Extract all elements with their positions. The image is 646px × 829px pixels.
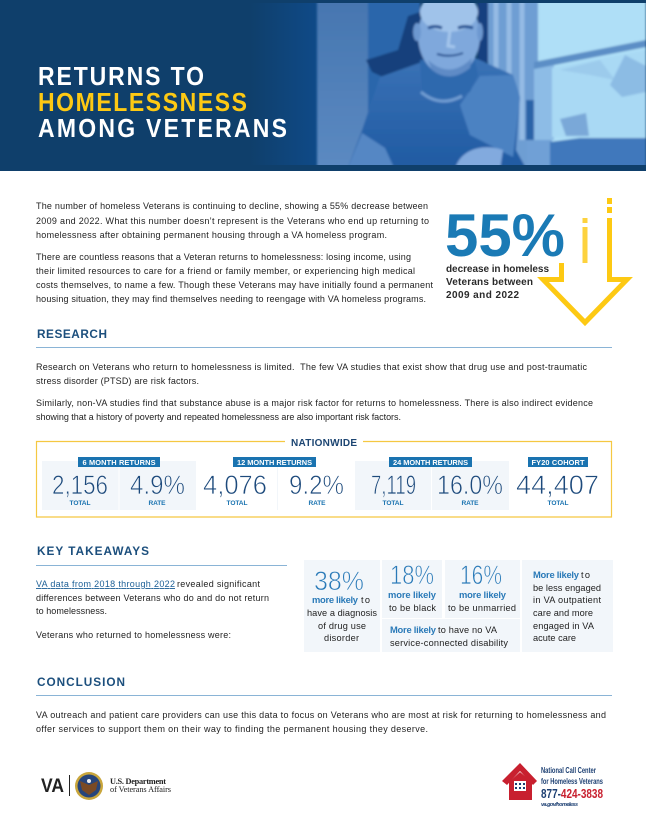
stat group: FY20 cohort: FY20 COHORT (532, 458, 585, 467)
icon: VA seal (75, 772, 103, 800)
title: RETURNS TO (38, 63, 204, 91)
callout: 55% decrease: 55% (445, 202, 565, 269)
panel: engagement in care: acute care (533, 633, 576, 643)
intro text: 2009 and 2022. What this number doesn’t represent is the Veterans who end up returning to (36, 216, 429, 226)
heading: nationwide: NATIONWIDE (291, 438, 357, 449)
conclusion text: VA outreach and patient care providers can use this data to focus on Veterans who are most at risk for returning to homelessness and (36, 710, 606, 720)
callout: 55% decrease: decrease in homeless (446, 264, 549, 275)
stat group: 24 month returns: TOTAL (382, 500, 404, 507)
icon: red house (502, 763, 537, 800)
panel: 16% unmarried: to be unmarried (448, 603, 516, 613)
intro text: housing situation, they may find themselves needing to reengage with VA homeless programs. (36, 294, 426, 304)
intro text (36, 201, 433, 304)
intro text: homelessness after obtaining permanent housing through a VA homeless program. (36, 230, 387, 240)
research text: Similarly, non-VA studies find that substance abuse is a major risk factor for returns to homelessness. There is also indirect evidence (36, 398, 593, 408)
stat group: 12 month returns: TOTAL (226, 500, 248, 507)
panel: 16% unmarried: 16% (460, 560, 502, 590)
panel: engagement in care: care and more (533, 608, 593, 618)
panel: 38% drug use disorder: more likely (312, 594, 359, 605)
key takeaways text: to homelessness. (36, 606, 107, 616)
header banner (0, 0, 646, 171)
intro text: costs themselves, to name a few. Though these Veterans may have initially found a permanent (36, 280, 433, 290)
research text: Research on Veterans who return to homelessness is limited. The few VA studies that exist show that drug use and post-traumatic (36, 362, 588, 372)
panel: nationwide statistics (36, 438, 612, 517)
stat group: 24 month returns: 7,119 (371, 470, 416, 500)
callout: 55% decrease: Veterans between (446, 277, 533, 288)
stat group: 6 month returns: RATE (148, 500, 166, 507)
stat group: 12 month returns: RATE (308, 500, 326, 507)
callout: 55% decrease: 2009 and 2022 (446, 290, 519, 301)
heading: key takeaways: KEY TAKEAWAYS (37, 544, 149, 558)
panel: 38% drug use disorder: 38% (314, 566, 364, 596)
heading: research: RESEARCH (37, 327, 107, 341)
logo: national call center: for Homeless Veterans (541, 776, 603, 786)
panel: 16% unmarried (445, 560, 520, 618)
title: HOMELESSNESS (38, 89, 247, 117)
callout: 55% decrease (445, 198, 627, 322)
panel: engagement in care: be less engaged (533, 583, 601, 593)
key takeaways text: revealed significant (177, 579, 260, 589)
header photo: man in a room (317, 0, 646, 170)
panel: 16% unmarried: more likely (459, 589, 507, 600)
stat group: FY20 cohort: TOTAL (548, 500, 568, 507)
stat group: 6 month returns: 2,156 (52, 470, 108, 500)
stat group: 12 month returns: 4,076 (203, 470, 267, 500)
key takeaways text: differences between Veterans who do and do not return (36, 593, 269, 603)
logo: VA department: of Veterans Affairs (110, 785, 171, 794)
panel: engagement in care (522, 560, 613, 652)
panel: engagement in care: to (581, 570, 590, 580)
panel: 38% drug use disorder (304, 560, 380, 652)
panel: 38% drug use disorder: have a diagnosis (307, 608, 377, 618)
conclusion text (36, 710, 606, 734)
stat group: 6 month returns: TOTAL (70, 500, 90, 507)
stat group: 24 month returns: 24 MONTH RETURNS (393, 458, 468, 467)
stat group: 12 month returns (203, 457, 344, 507)
panel: 18% black: to be black (389, 603, 436, 613)
panel: 38% drug use disorder: to (361, 595, 370, 605)
stat group: 6 month returns (52, 457, 185, 507)
panel: 38% drug use disorder: of drug use (318, 621, 366, 631)
logo: VA department: U.S. Department (110, 777, 166, 786)
panel: no service-connected disability: service-connected disability (390, 638, 508, 648)
research text (36, 362, 593, 422)
panel: engagement in care: engaged in VA (533, 621, 595, 631)
stat group: 12 month returns: 9.2% (289, 470, 344, 500)
panel: 18% black: more likely (388, 589, 437, 600)
panel: engagement in care: in VA outpatient (533, 595, 601, 605)
intro text: their limited resources to care for a friend or family member, or experiencing high medical (36, 266, 415, 276)
stat group: 6 month returns: 6 MONTH RETURNS (82, 458, 156, 467)
title (38, 63, 287, 143)
panel: no service-connected disability (382, 619, 520, 652)
key takeaways text: VA data from 2018 through 2022 (36, 579, 175, 589)
panel: 38% drug use disorder: disorder (324, 633, 359, 643)
title: AMONG VETERANS (38, 115, 287, 143)
stat group: 24 month returns: 16.0% (437, 470, 503, 500)
research text: showing that a history of poverty and repeated homelessness are also important risk factors. (36, 412, 401, 422)
stat group: 24 month returns: RATE (462, 500, 479, 507)
stat group: 12 month returns: 12 MONTH RETURNS (237, 458, 312, 467)
panel: no service-connected disability: to have no VA (438, 625, 498, 635)
panel: 18% black: 18% (390, 560, 434, 590)
key takeaways text: Veterans who returned to homelessness were: (36, 630, 231, 640)
logo: national call center: 877-424-3838 (541, 787, 603, 801)
logo: national call center: va.gov/homeless (541, 802, 578, 808)
research text: stress disorder (PTSD) are risk factors. (36, 376, 199, 386)
gradient from banner navy into the photo (250, 3, 318, 165)
panel: engagement in care: More likely (533, 569, 580, 580)
logo: national call center (502, 763, 603, 808)
key takeaways text (36, 579, 269, 640)
intro text: There are countless reasons that a Veteran returns to homelessness: losing income, using (36, 252, 411, 262)
panel: 18% black (382, 560, 442, 618)
intro text: The number of homeless Veterans is continuing to decline, showing a 55% decrease between (36, 201, 428, 211)
icon: yellow down arrow (543, 198, 627, 322)
logo: VA department: VA (41, 775, 64, 797)
heading: conclusion: CONCLUSION (37, 675, 125, 689)
panel: no service-connected disability: More likely (390, 624, 437, 635)
stat group: 6 month returns: 4.9% (130, 470, 185, 500)
logo: VA department (41, 772, 171, 800)
stat group: 24 month returns (371, 457, 503, 507)
stat group: FY20 cohort (516, 457, 599, 507)
conclusion text: offer services to support them on their way to finding the permanent housing they deserve. (36, 724, 428, 734)
logo: national call center: National Call Center (541, 765, 597, 775)
stat group: FY20 cohort: 44,407 (516, 470, 599, 500)
